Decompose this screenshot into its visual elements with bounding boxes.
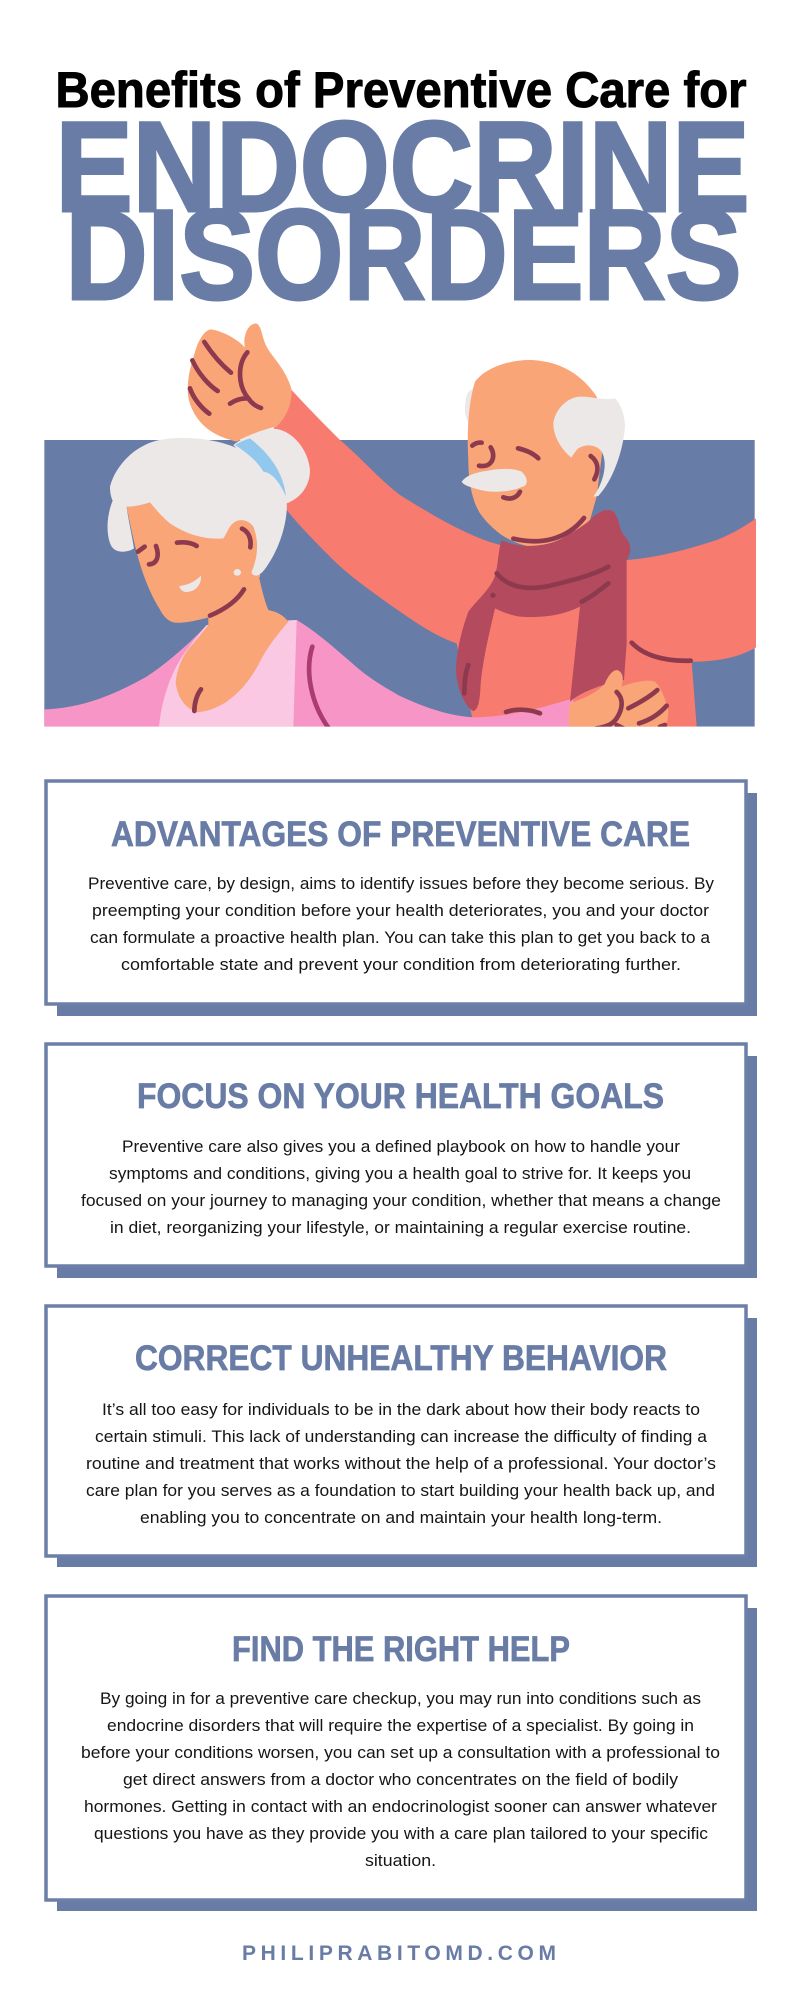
card frame [46, 1044, 746, 1266]
body text: care plan for you serves as a foundation to start building your health back up, and [86, 1481, 715, 1500]
body text: certain stimuli. This lack of understanding can increase the difficulty of finding a [95, 1427, 708, 1446]
body text: in diet, reorganizing your lifestyle, or maintaining a regular exercise routine. [110, 1218, 691, 1237]
body text: get direct answers from a doctor who concentrates on the field of bodily [123, 1770, 679, 1789]
heading: FIND THE RIGHT HELP [232, 1630, 570, 1669]
panel: advantages of preventive care [46, 781, 757, 1016]
man: back hair [465, 389, 473, 423]
man: arms and torso [267, 390, 756, 727]
panel: find the right help [46, 1596, 757, 1911]
card shadow [57, 793, 757, 1016]
man: lower hand lines [597, 690, 667, 728]
body text: Preventive care, by design, aims to identify issues before they become serious. By [88, 874, 714, 893]
man: scarf rivet [490, 593, 496, 598]
man: scarf [456, 510, 630, 711]
title [56, 62, 750, 327]
body text [86, 1400, 716, 1527]
footer website: PHILIPRABITOMD.COM [242, 1942, 556, 1965]
woman: facial lines [138, 529, 251, 711]
body text: It’s all too easy for individuals to be in the dark about how their body reacts to [102, 1400, 700, 1419]
woman: cardigan [44, 620, 573, 727]
illustration background panel [44, 440, 755, 727]
card frame [46, 1306, 746, 1556]
body text: symptoms and conditions, giving you a health goal to strive for. It keeps you [109, 1164, 691, 1183]
woman: hair [108, 438, 287, 576]
man: raised hand [188, 323, 292, 442]
card frame [46, 781, 746, 1004]
body text: preempting your condition before your health deteriorates, you and your doctor [92, 901, 709, 920]
body text: enabling you to concentrate on and maintain your health long-term. [140, 1508, 662, 1527]
body text: situation. [365, 1851, 436, 1870]
panel: focus on your health goals [46, 1044, 757, 1278]
body text: comfortable state and prevent your condition from deteriorating further. [121, 955, 681, 974]
body text [81, 1137, 721, 1237]
body text: before your conditions worsen, you can set up a consultation with a professional to [81, 1743, 720, 1762]
panel: correct unhealthy behavior [46, 1306, 757, 1567]
woman: face [127, 497, 260, 623]
man: hair [553, 397, 625, 497]
heading: FOCUS ON YOUR HEALTH GOALS [137, 1077, 664, 1116]
woman: hair bun [233, 429, 310, 503]
body text: hormones. Getting in contact with an endocrinologist sooner can answer whatever [84, 1797, 717, 1816]
card shadow [57, 1608, 757, 1911]
woman: smile [179, 576, 201, 592]
body text: can formulate a proactive health plan. You can take this plan to get you back to a [90, 928, 711, 947]
body text: routine and treatment that works without the help of a professional. Your doctor’s [86, 1454, 716, 1473]
illustration: elderly couple [44, 323, 756, 730]
man: lower hand [569, 670, 668, 730]
woman: light pink top [159, 620, 297, 727]
heading: CORRECT UNHEALTHY BEHAVIOR [135, 1339, 667, 1378]
body text: By going in for a preventive care checkup, you may run into conditions such as [100, 1689, 701, 1708]
card frame [46, 1596, 746, 1900]
body text: questions you have as they provide you with a care plan tailored to your specific [94, 1824, 709, 1843]
heading: ADVANTAGES OF PREVENTIVE CARE [111, 815, 690, 854]
body text: Preventive care also gives you a defined playbook on how to handle your [122, 1137, 680, 1156]
body text: focused on your journey to managing your condition, whether that means a change [81, 1191, 721, 1210]
card shadow [57, 1318, 757, 1567]
woman: cardigan seam [309, 647, 330, 730]
woman: neck and chest [176, 573, 288, 712]
woman: earring and hair tip [234, 569, 241, 576]
man: face and scarf lines [464, 443, 691, 713]
title line: benefits: Benefits of Preventive Care for [56, 62, 746, 118]
card shadow [57, 1056, 757, 1278]
man: mustache [462, 469, 527, 492]
man: head [468, 360, 603, 547]
body text [81, 1689, 720, 1870]
man: hand lines [190, 342, 261, 414]
woman: hair ribbon [235, 438, 286, 497]
body text [88, 874, 714, 974]
body text: endocrine disorders that will require the expertise of a specialist. By going in [107, 1716, 694, 1735]
